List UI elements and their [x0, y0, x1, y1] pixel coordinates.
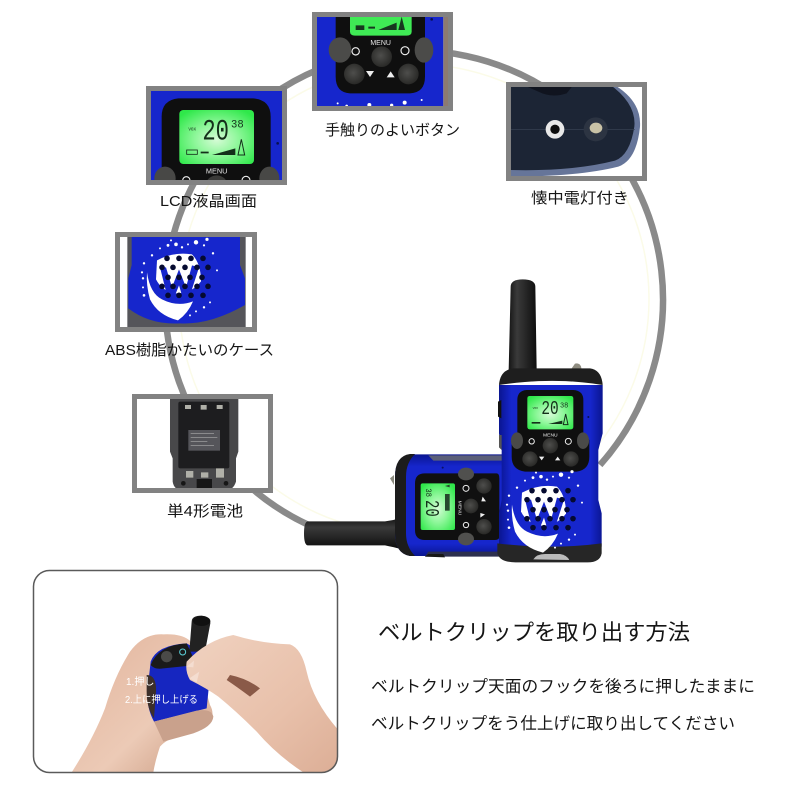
label: buttons: 手触りのよいボタン — [325, 122, 460, 139]
label: flashlight: 懐中電灯付き — [531, 190, 629, 207]
panel: lcd detail: VOX — [188, 128, 197, 133]
label: case: ABS樹脂かたいのケース — [105, 342, 274, 359]
top clip — [572, 363, 582, 370]
control face horizontal — [415, 473, 499, 540]
main radio: MENU — [543, 432, 558, 438]
instructions line 2: ベルトクリップをう仕上げに取り出してください — [371, 714, 735, 733]
panel: buttons detail: MENU — [370, 40, 391, 47]
panel: lcd detail: 20 — [202, 115, 229, 148]
left thumb — [154, 710, 213, 742]
panel: lcd detail — [151, 91, 282, 180]
decorative ring — [165, 50, 663, 534]
panel: lcd detail: 38 — [231, 120, 244, 132]
horizontal radio: 20 — [420, 500, 442, 517]
panel: belt clip photo — [33, 570, 338, 773]
panel: battery detail — [170, 399, 268, 488]
panel frame: lcd — [148, 88, 284, 182]
control face vertical — [512, 390, 589, 472]
panel frame: case — [118, 234, 254, 330]
instructions line 1: ベルトクリップ天面のフックを後ろに押したままに — [371, 677, 755, 696]
panel frame: flashlight — [508, 84, 644, 178]
right hand — [186, 635, 338, 772]
main radio: VOX — [533, 407, 538, 410]
panel: buttons detail — [317, 17, 448, 106]
panel frame: buttons — [314, 14, 450, 108]
label: lcd: LCD液晶画面 — [160, 193, 257, 210]
main radio: 38 — [560, 402, 568, 410]
panel: lcd detail: MENU — [206, 166, 227, 175]
antenna horizontal — [304, 518, 398, 548]
speaker logo — [506, 470, 583, 553]
horizontal radio: 38 — [423, 488, 432, 497]
antenna vertical — [509, 279, 537, 370]
photo caption 2: 2.上に押し上げる — [125, 693, 198, 706]
main radio — [497, 279, 603, 562]
photo caption 1: 1.押し — [126, 675, 154, 688]
panel: case detail — [127, 237, 246, 327]
panel: flashlight detail — [511, 87, 640, 176]
panel frame: battery — [134, 396, 270, 490]
main radio: 20 — [541, 398, 559, 420]
heading: ベルトクリップを取り出す方法 — [378, 620, 690, 645]
left hand — [72, 634, 213, 772]
label: battery: 単4形電池 — [167, 503, 243, 520]
body vertical — [497, 368, 603, 562]
horizontal radio: MENU — [456, 501, 462, 516]
body horizontal — [390, 454, 503, 557]
horizontal radio — [304, 454, 503, 557]
radio in hands — [147, 643, 212, 722]
